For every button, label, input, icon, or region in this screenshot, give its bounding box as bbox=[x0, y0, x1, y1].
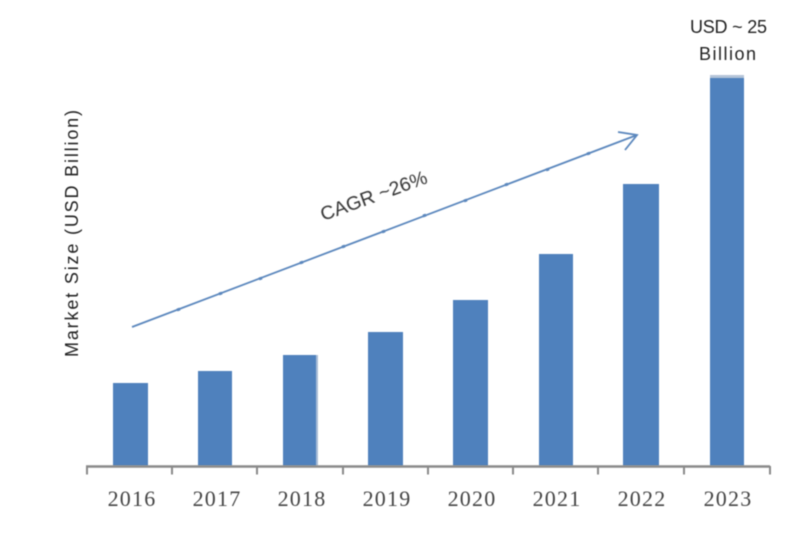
label 2019: 2019 bbox=[363, 486, 411, 511]
bar 2017 bbox=[198, 371, 232, 466]
label 2020: 2020 bbox=[448, 486, 496, 511]
callout: 2023 value: USD ~ 25 bbox=[690, 17, 767, 37]
y axis title: Market Size (USD Billion) bbox=[62, 110, 82, 357]
label 2017: 2017 bbox=[193, 486, 241, 511]
bar 2020 bbox=[453, 300, 488, 466]
label 2023: 2023 bbox=[704, 486, 752, 511]
arrow: growth trend bbox=[132, 132, 637, 327]
bar 2022 bbox=[623, 184, 659, 466]
label 2016: 2016 bbox=[108, 486, 156, 511]
x axis bbox=[86, 466, 770, 474]
bar 2021 bbox=[539, 254, 573, 466]
CAGR label: CAGR ~26% bbox=[317, 167, 430, 226]
bar 2023 bbox=[710, 75, 744, 466]
bar 2018 bbox=[283, 355, 318, 466]
callout: 2023 value: Billion bbox=[699, 44, 756, 64]
label 2018: 2018 bbox=[278, 486, 326, 511]
x axis labels bbox=[108, 486, 752, 511]
bars bbox=[113, 75, 744, 466]
bar 2019 bbox=[368, 332, 403, 466]
bar 2016 bbox=[113, 383, 148, 466]
label 2022: 2022 bbox=[618, 486, 666, 511]
label 2021: 2021 bbox=[533, 486, 581, 511]
callout: 2023 value bbox=[690, 17, 767, 64]
